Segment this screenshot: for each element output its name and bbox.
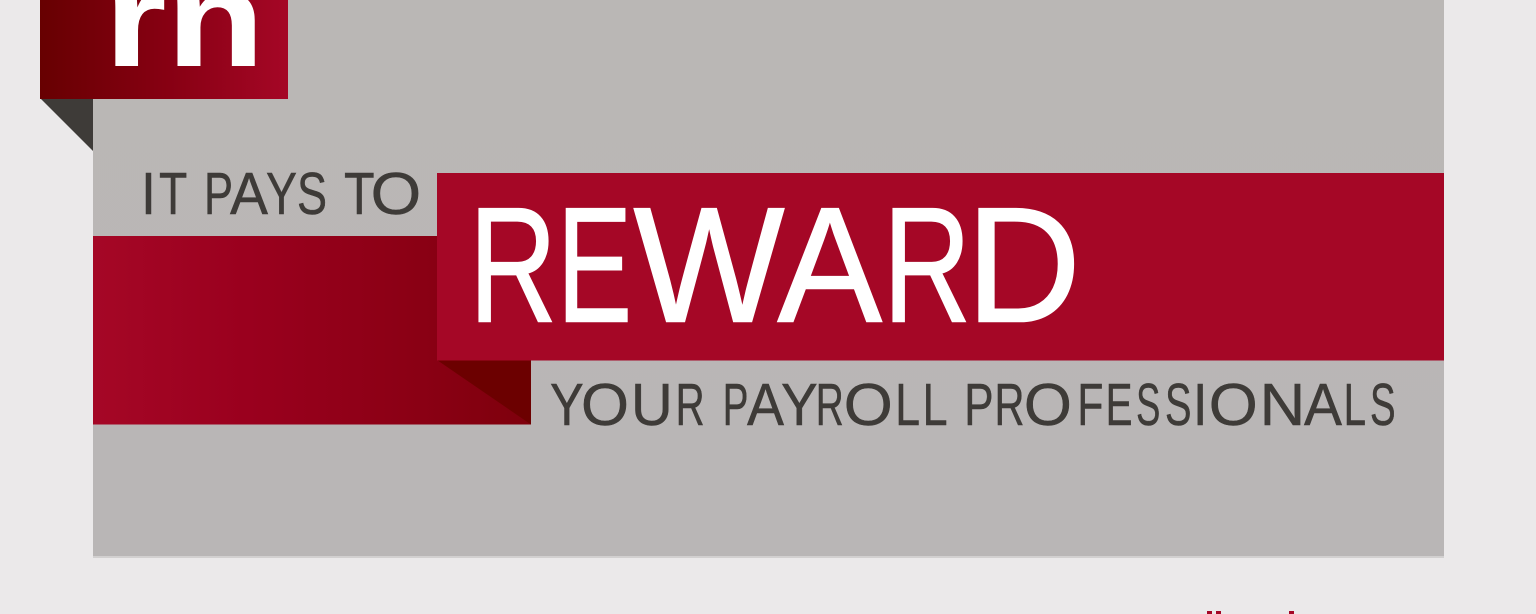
- heading: your payroll professionals: S: [1370, 372, 1396, 438]
- heading: your payroll professionals: R: [994, 372, 1024, 438]
- heading: your payroll professionals: A: [1304, 372, 1343, 438]
- heading: it pays to: T: [159, 161, 186, 227]
- heading: your payroll professionals: R: [676, 372, 705, 438]
- heading: reward: R: [469, 174, 557, 356]
- heading: reward: W: [634, 174, 785, 356]
- heading: your payroll professionals: F: [1077, 372, 1103, 438]
- heading: your payroll professionals: S: [1165, 372, 1192, 438]
- heading: your payroll professionals: I: [1193, 372, 1207, 438]
- ribbon fold shadow: [437, 360, 531, 424]
- cropped red text at bottom edge: [1207, 611, 1294, 614]
- heading: it pays to: O: [371, 161, 421, 227]
- heading: your payroll professionals: L: [1344, 372, 1366, 438]
- heading: it pays to: Y: [266, 161, 297, 227]
- heading: your payroll professionals: O: [1024, 372, 1072, 438]
- heading: reward: R: [883, 174, 971, 356]
- upper red ribbon: [437, 173, 1444, 360]
- heading: it pays to: T: [344, 161, 375, 227]
- heading: your payroll professionals: Y: [550, 372, 584, 438]
- heading: your payroll professionals: S: [1136, 372, 1160, 438]
- heading: your payroll professionals: O: [581, 372, 629, 438]
- heading: your payroll professionals: A: [747, 372, 785, 438]
- heading: your payroll professionals: U: [631, 372, 673, 438]
- lower red ribbon band: [93, 236, 531, 424]
- heading: it pays to: I: [141, 161, 156, 227]
- logo ribbon fold: [40, 98, 93, 151]
- heading: your payroll professionals: N: [1260, 372, 1305, 438]
- heading: your payroll professionals: Y: [781, 372, 818, 438]
- heading: your payroll professionals: P: [723, 372, 748, 438]
- heading: it pays to: S: [297, 161, 327, 227]
- heading: your payroll professionals: L: [922, 372, 946, 438]
- heading: it pays to: A: [230, 161, 269, 227]
- logo block: [40, 0, 288, 99]
- heading: reward: D: [966, 174, 1081, 356]
- heading: your payroll professionals: P: [964, 372, 994, 438]
- heading: your payroll professionals: E: [1106, 372, 1132, 438]
- heading: it pays to: P: [204, 161, 233, 227]
- heading: your payroll professionals: L: [895, 372, 920, 438]
- heading: reward: A: [778, 174, 883, 356]
- heading: your payroll professionals: O: [1209, 372, 1258, 438]
- heading: reward: E: [557, 174, 632, 356]
- grey panel: [93, 0, 1444, 558]
- heading: your payroll professionals: R: [816, 372, 844, 438]
- heading: your payroll professionals: O: [844, 372, 893, 438]
